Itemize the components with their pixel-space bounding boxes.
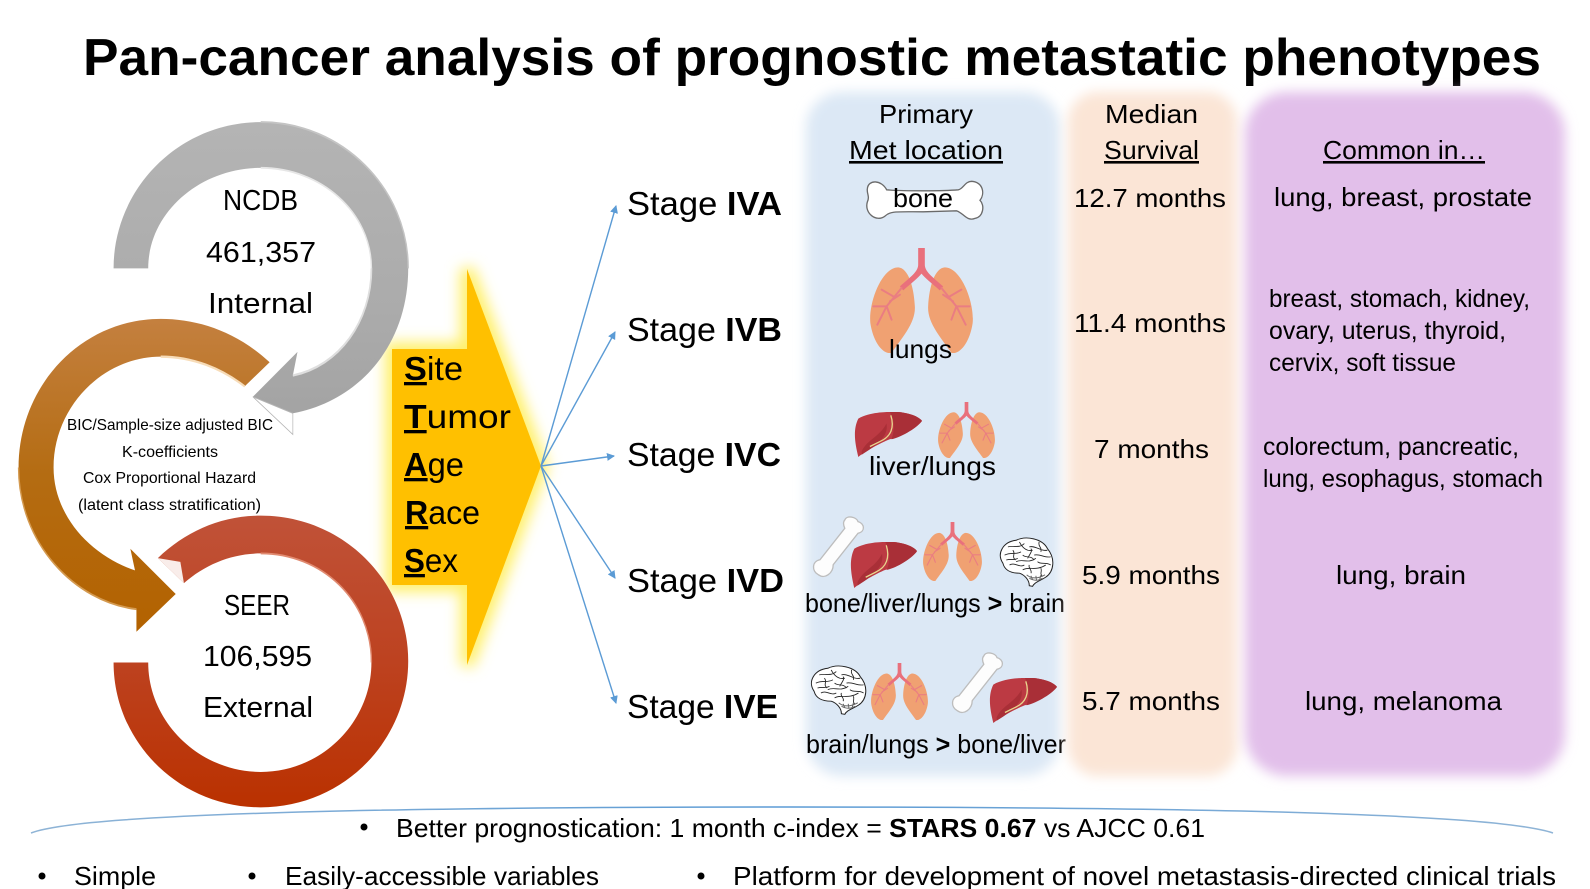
heading: median survival: [1104, 99, 1199, 165]
text: methods: [67, 417, 273, 514]
heading: median survival: Survival: [1104, 135, 1199, 165]
label: bone: bone: [893, 183, 953, 213]
text: IVC common sites: colorectum, pancreatic,: [1263, 433, 1519, 461]
text: STAGE variables: [404, 350, 511, 579]
heading: primary met location: [849, 99, 1003, 165]
icon: bone diagonal IVE: [953, 653, 1002, 712]
stage labels: Stage IVC: [627, 436, 781, 473]
panel: median survival: [1068, 92, 1237, 776]
yellow STAGE arrow: [392, 269, 541, 665]
label: bone/liver/lungs > brain: bone/liver/lungs > brain: [805, 588, 1065, 618]
value: IVB survival: 11.4 months: [1074, 308, 1226, 338]
text: STAGE variables: Tumor: [404, 398, 511, 435]
text: SEER: SEER: [224, 590, 290, 622]
stage labels: [627, 185, 784, 725]
text: IVB common sites: [1269, 285, 1530, 377]
text: IVE common sites: lung, melanoma: [1305, 686, 1503, 716]
text: methods: Cox Proportional Hazard: [83, 470, 256, 487]
panel: common in: [1245, 92, 1565, 776]
label: lungs: lungs: [889, 334, 952, 364]
value: IVE survival: 5.7 months: [1082, 686, 1220, 716]
text: bottom bullets: [38, 861, 1556, 889]
text: SEER: 106,595: [203, 641, 312, 673]
icon: bone: [867, 181, 983, 219]
title: Pan-cancer analysis of prognostic metastatic phenotypes: [83, 29, 1541, 87]
text: IVB common sites: ovary, uterus, thyroid,: [1269, 317, 1506, 345]
icon: liver IVE: [990, 678, 1057, 723]
text: NCDB: Internal: [208, 288, 313, 320]
text: methods: K-coefficients: [122, 444, 218, 461]
text: IVB common sites: breast, stomach, kidney,: [1269, 285, 1530, 313]
heading: primary met location: Met location: [849, 135, 1003, 165]
text: STAGE variables: Sex: [404, 542, 458, 579]
arrow: brown: [19, 319, 270, 632]
icon: liver IVD: [851, 542, 917, 588]
cycle arrows: [19, 122, 408, 807]
text: NCDB: 461,357: [206, 237, 316, 269]
value: IVA survival: 12.7 months: [1074, 183, 1226, 213]
text: IVC common sites: lung, esophagus, stomach: [1263, 465, 1543, 493]
text: prognostication bullet: Better prognostication: 1 month c-index = STARS 0.67 vs AJCC 0.61: [396, 813, 1205, 843]
label: brain/lungs > bone/liver: brain/lungs > bone/liver: [806, 729, 1066, 759]
stage labels: Stage IVA: [627, 185, 782, 222]
text: methods: (latent class stratification): [78, 497, 261, 514]
text: NCDB: [206, 185, 316, 320]
text: SEER: [203, 590, 313, 724]
stage labels: Stage IVB: [627, 311, 782, 348]
icon: brain IVE: [811, 666, 866, 714]
text: NCDB: NCDB: [223, 185, 298, 217]
text: methods: BIC/Sample-size adjusted BIC: [67, 417, 273, 434]
text: STAGE variables: Race: [405, 494, 480, 531]
panel: primary met location: [805, 92, 1066, 776]
bottom arc: [31, 807, 1553, 833]
stage labels: Stage IVD: [627, 562, 784, 599]
arrow: gray NCDB: [114, 122, 408, 435]
heading: primary met location: Primary: [879, 99, 973, 129]
text: IVC common sites: [1263, 433, 1543, 493]
icon: lungs IVE: [871, 663, 928, 720]
text: SEER: External: [203, 692, 313, 724]
icon: lungs IVD: [923, 522, 982, 581]
heading: median survival: Median: [1105, 99, 1198, 129]
icon: liver: [855, 412, 922, 457]
value: IVC survival: 7 months: [1094, 434, 1209, 464]
arrows: stage fan-out: [541, 206, 616, 703]
icon: lungs: [870, 248, 973, 353]
text: IVB common sites: cervix, soft tissue: [1269, 349, 1456, 377]
text: STAGE variables: Site: [404, 350, 463, 387]
heading: common in: Common in…: [1323, 135, 1485, 165]
icon: bone diagonal: [814, 517, 863, 576]
text: IVA common sites: lung, breast, prostate: [1274, 182, 1532, 212]
text: STAGE variables: Age: [404, 446, 464, 483]
value: IVD survival: 5.9 months: [1082, 560, 1220, 590]
icon: lungs small: [938, 402, 995, 458]
icon: brain IVD: [1000, 538, 1053, 586]
stage labels: Stage IVE: [627, 688, 778, 725]
text: IVD common sites: lung, brain: [1336, 560, 1466, 590]
arrow: red SEER: [114, 516, 408, 807]
label: liver/lungs: liver/lungs: [869, 451, 996, 481]
